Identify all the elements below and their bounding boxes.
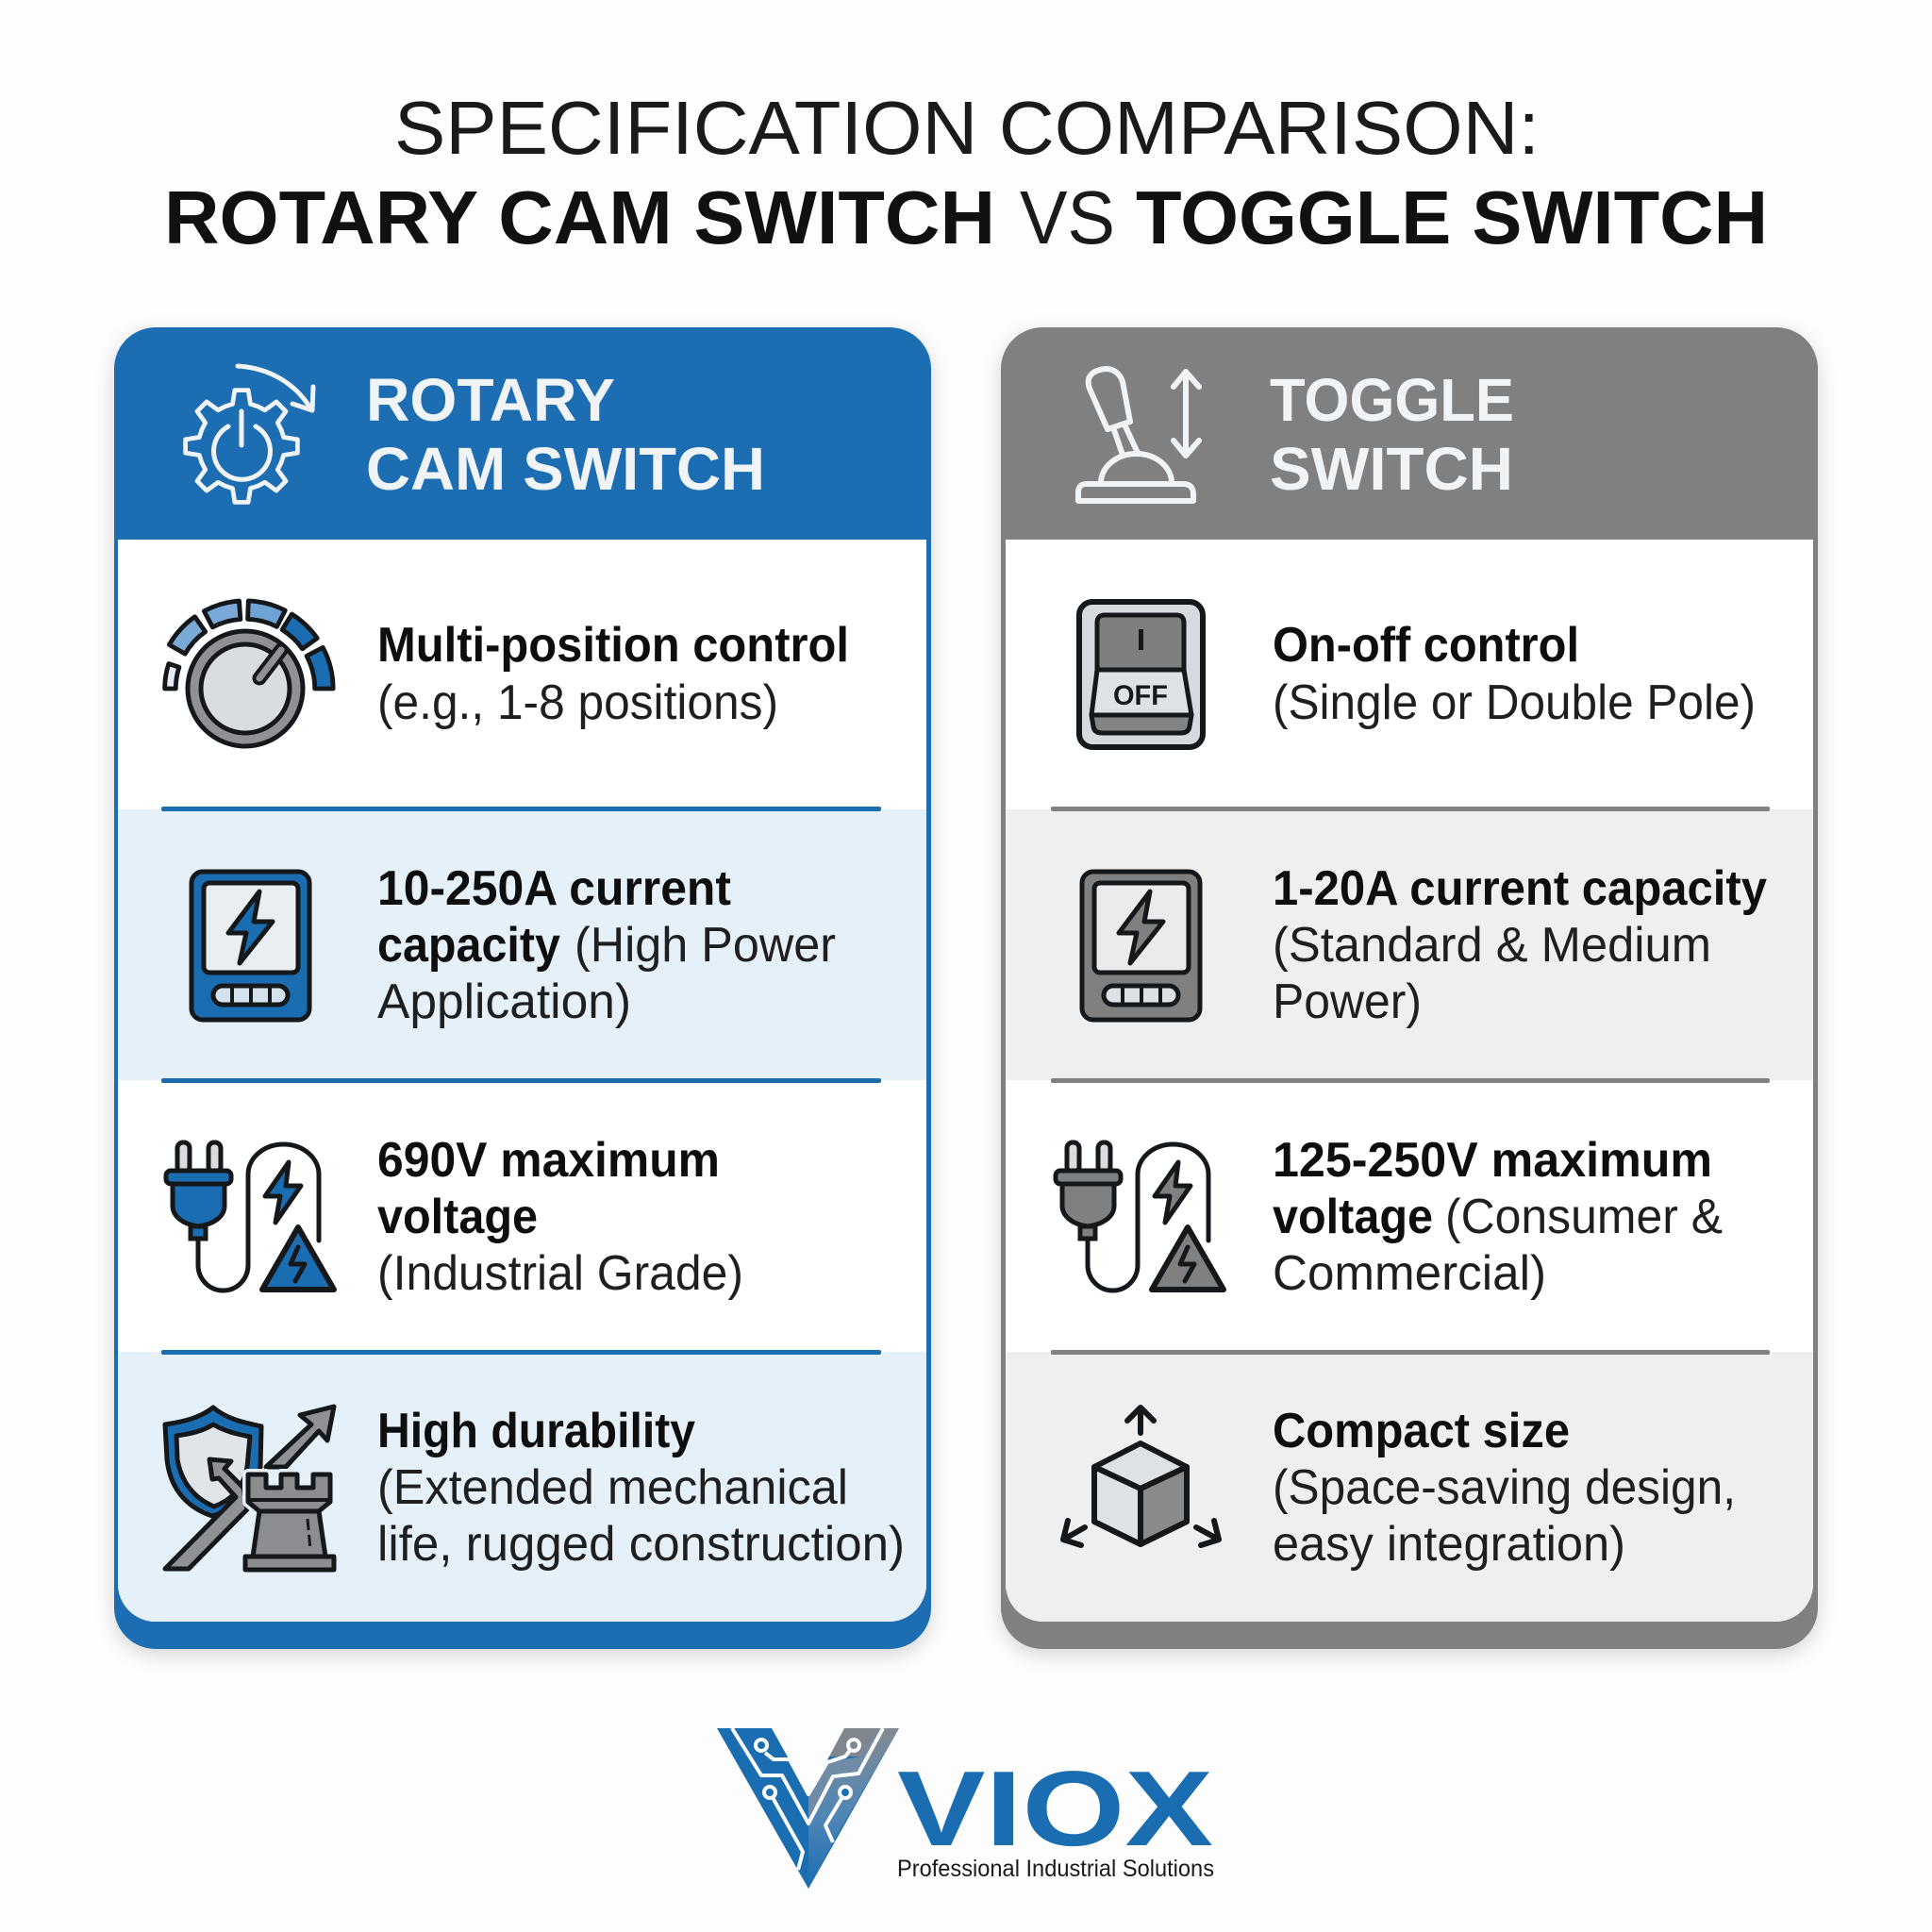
row: current capacity: 1-20A current capacity [1273, 861, 1767, 916]
row: current capacity: (High Power [575, 918, 836, 973]
row: maximum voltage: 690V maximum [377, 1133, 720, 1188]
icon: toggle lever with up-down arrow [1078, 369, 1199, 501]
row: on-off control: (Single or Double Pole) [1273, 675, 1756, 730]
row: multi-position control: (e.g., 1-8 positions) [377, 675, 778, 730]
row: current capacity: capacity [377, 918, 560, 973]
header: toggle switch: TOGGLE [1270, 366, 1514, 434]
row: on-off control: On-off control [1273, 618, 1579, 673]
icon: blue meter with bolt [192, 872, 309, 1020]
row: maximum voltage: (Industrial Grade) [377, 1246, 743, 1301]
row: current capacity: Application) [377, 974, 631, 1029]
row: maximum voltage: Commercial) [1273, 1246, 1546, 1301]
row: maximum voltage: voltage [1273, 1190, 1433, 1244]
icon: rocker switch [1079, 602, 1203, 747]
title: TOGGLE SWITCH [1136, 175, 1768, 259]
row: compact size: easy integration) [1273, 1517, 1625, 1572]
icon: grey plug, bolt and warning triangle [1056, 1142, 1224, 1291]
row: multi-position control [165, 601, 849, 746]
row: high durability: life, rugged construction) [377, 1517, 905, 1572]
header: rotary cam switch: ROTARY [366, 366, 615, 434]
row: current capacity [1082, 861, 1767, 1029]
row: high durability: (Extended mechanical [377, 1460, 848, 1515]
row: compact size: (Space-saving design, [1273, 1460, 1736, 1515]
row: maximum voltage: 125-250V maximum [1273, 1133, 1712, 1188]
row: current capacity: (Standard & Medium [1273, 918, 1711, 973]
row: maximum voltage: (Consumer & [1445, 1190, 1723, 1244]
row: maximum voltage [1056, 1133, 1723, 1301]
row: compact size: Compact size [1273, 1404, 1570, 1458]
row: high durability [165, 1404, 905, 1572]
icon: shield, arrows and castle tower [165, 1407, 334, 1570]
row: multi-position control: Multi-position control [377, 618, 849, 673]
title: VS [1020, 175, 1115, 259]
row: on-off control [1079, 602, 1756, 747]
panel: toggle switch [1001, 327, 1818, 1649]
logo mark: circuit V [717, 1728, 899, 1889]
icon: grey meter with bolt [1082, 872, 1200, 1020]
header: rotary cam switch [366, 366, 765, 503]
row: current capacity [192, 861, 836, 1029]
title [164, 86, 1768, 259]
icon: gear with power symbol and rotation arrow [186, 366, 313, 502]
row: high durability: High durability [377, 1404, 695, 1458]
icon: rocker switch: OFF [1113, 680, 1168, 711]
row: current capacity: Power) [1273, 974, 1422, 1029]
title: ROTARY CAM SWITCH [164, 175, 995, 259]
icon: cube with arrows [1063, 1407, 1219, 1545]
row: compact size [1063, 1404, 1736, 1572]
row: current capacity: 10-250A current [377, 861, 731, 916]
icon: rotary dial [165, 601, 333, 746]
logo: VIOX [717, 1728, 1214, 1889]
header: rotary cam switch: CAM SWITCH [366, 435, 765, 503]
row: maximum voltage: voltage [377, 1190, 538, 1244]
header: toggle switch [1270, 366, 1514, 503]
logo: VIOX: Professional Industrial Solutions [897, 1856, 1214, 1882]
header: toggle switch: SWITCH [1270, 435, 1513, 503]
logo: VIOX: VIOX [897, 1749, 1213, 1868]
panel: rotary cam switch [114, 327, 931, 1649]
icon: blue plug, bolt and warning triangle [166, 1142, 334, 1291]
row: maximum voltage [166, 1133, 743, 1301]
title: SPECIFICATION COMPARISON: [394, 86, 1540, 170]
